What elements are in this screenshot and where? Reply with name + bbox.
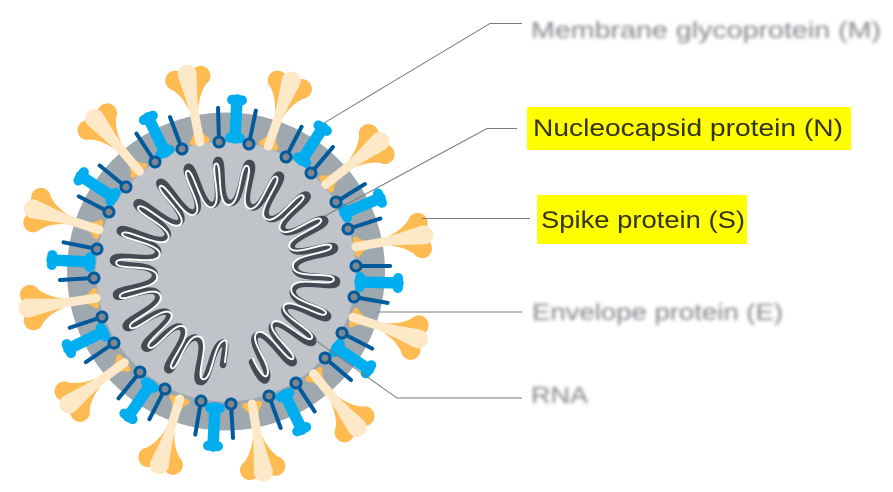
pin 3: [96, 162, 133, 194]
pin 14: [335, 326, 375, 353]
spike proteins: [15, 61, 437, 485]
callout leader lines: [315, 24, 530, 398]
RNA white strand: [114, 161, 336, 381]
label: spike protein: [537, 195, 747, 244]
text N: Nucleocapsid protein (N): [533, 115, 843, 142]
pin 8: [279, 124, 306, 164]
pin 1: [165, 115, 188, 155]
glycoprotein 7: [208, 408, 220, 446]
leader: membrane glycoprotein: [324, 24, 522, 123]
pin 11: [342, 214, 382, 235]
pin 2: [132, 131, 162, 169]
spike 9: [342, 294, 435, 364]
text S: Spike protein (S): [541, 207, 745, 234]
glycoprotein 12: [144, 116, 169, 154]
glycoprotein 9: [67, 328, 105, 353]
pin 21: [115, 365, 147, 402]
virus particle: [15, 61, 437, 485]
pin 19: [190, 395, 207, 435]
pin 15: [318, 351, 354, 384]
leader: RNA: [315, 340, 522, 398]
small membrane protein pins: [60, 108, 390, 438]
glycoprotein 6: [281, 393, 306, 431]
spike 11: [308, 118, 401, 205]
interior of virus: [96, 142, 356, 402]
glycoprotein 8: [124, 382, 154, 419]
spike 12: [245, 64, 316, 158]
membrane glycoproteins: [52, 100, 398, 446]
label: envelope protein (blurred): Envelope protein (E): [532, 299, 783, 325]
spike 3: [17, 184, 110, 253]
pin 7: [243, 110, 261, 150]
highlight box S: [537, 195, 747, 244]
leader: spike protein: [422, 218, 530, 220]
glycoprotein 2: [298, 125, 327, 163]
pin 17: [263, 390, 285, 430]
glycoprotein 10: [52, 255, 90, 267]
spike 4: [15, 275, 104, 332]
leader: envelope protein: [377, 311, 522, 313]
glycoprotein 11: [78, 172, 116, 201]
pin 10: [329, 180, 368, 209]
pin 5: [63, 237, 103, 255]
glycoprotein 5: [334, 344, 371, 373]
pin 13: [348, 291, 388, 308]
spike 5: [48, 342, 142, 428]
pin 18: [226, 399, 238, 438]
RNA dark strand: [113, 160, 337, 382]
RNA strand: [113, 160, 337, 382]
spike 10: [348, 211, 437, 270]
highlight box N: [527, 107, 851, 150]
label: RNA (blurred): RNA: [531, 382, 589, 408]
glycoprotein 1: [230, 100, 242, 138]
spike 8: [293, 356, 381, 449]
spike 1: [163, 61, 223, 151]
pin 20: [145, 382, 172, 422]
pin 22: [83, 336, 121, 366]
label: nucleocapsid protein: [527, 107, 851, 150]
pin 9: [304, 144, 337, 180]
spike 7: [229, 396, 287, 485]
spike 2: [71, 97, 160, 189]
label: membrane glycoprotein (blurred): Membrane glycoprotein (M): [531, 17, 881, 43]
pin 4: [76, 192, 116, 219]
leader: nucleocapsid protein: [325, 128, 517, 216]
pin 23: [68, 311, 108, 332]
spike 6: [135, 388, 203, 481]
pin 16: [289, 376, 319, 414]
glycoprotein 4: [360, 277, 398, 288]
pin 24: [60, 273, 99, 285]
glycoprotein 3: [343, 194, 382, 218]
pin 12: [351, 261, 390, 271]
envelope membrane: [67, 112, 385, 430]
pin 6: [213, 108, 224, 147]
